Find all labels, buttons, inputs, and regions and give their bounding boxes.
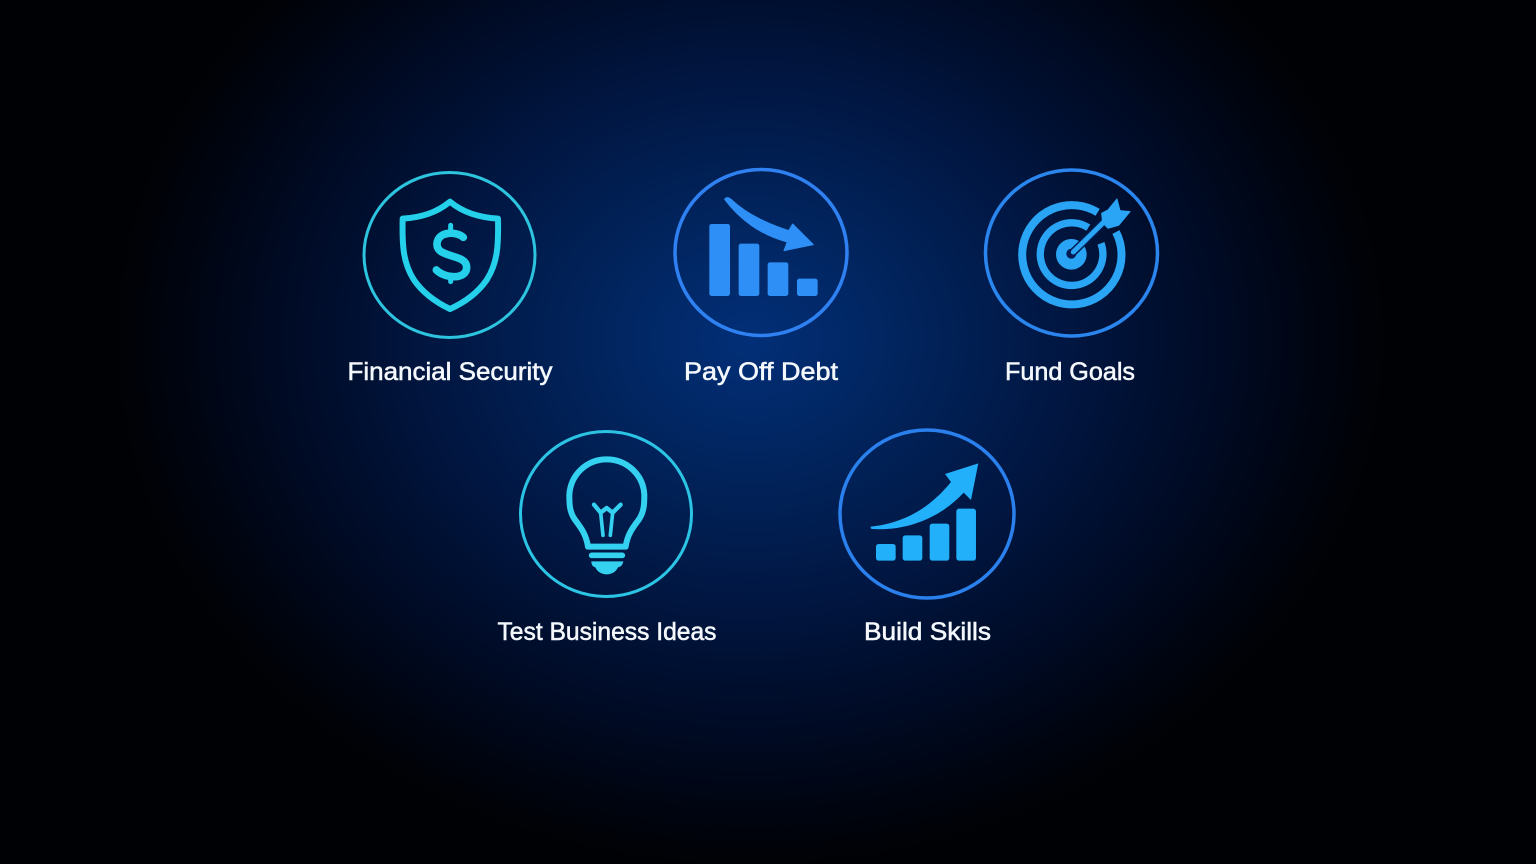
item: Pay Off Debt xyxy=(675,170,847,386)
label: Build Skills: Build Skills xyxy=(864,618,991,646)
item: Test Business Ideas xyxy=(498,432,716,646)
label: Financial Security: Financial Security xyxy=(348,358,553,386)
label: Fund Goals: Fund Goals xyxy=(1005,358,1135,386)
icon: shield with dollar sign xyxy=(364,172,535,338)
label: Pay Off Debt: Pay Off Debt xyxy=(684,358,838,386)
item: Fund Goals xyxy=(986,170,1158,386)
icon: descending bars with arrow xyxy=(675,170,847,336)
item: Build Skills xyxy=(840,430,1014,646)
icon: target with arrow xyxy=(986,170,1158,336)
label: Test Business Ideas: Test Business Ideas xyxy=(498,618,716,646)
item: Financial Security xyxy=(348,172,553,386)
icon: light bulb xyxy=(520,432,692,596)
icon: rising bars with arrow xyxy=(840,430,1014,598)
